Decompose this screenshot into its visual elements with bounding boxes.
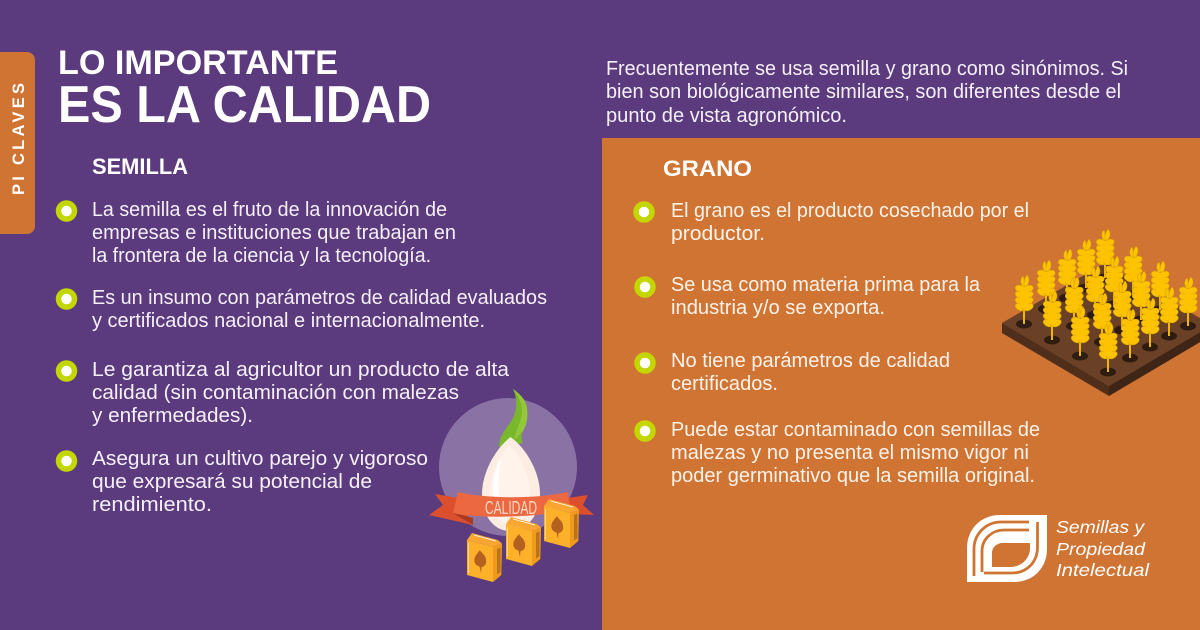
list: grano	[636, 200, 1040, 487]
intro text: punto de vista agronómico.	[606, 105, 847, 127]
semilla item 4: rendimiento.	[92, 494, 212, 516]
logo text: Intelectual	[1056, 560, 1150, 580]
logo mark	[967, 515, 1047, 582]
intro text: Frecuentemente se usa semilla y grano como sinónimos. Si	[606, 58, 1128, 80]
title: LO IMPORTANTE	[58, 44, 338, 82]
heading: grano: GRANO	[663, 156, 752, 181]
grano item 4: Puede estar contaminado con semillas de	[671, 419, 1040, 441]
illustration: wheat field	[1002, 229, 1200, 396]
logo: Semillas y Propiedad Intelectual	[967, 515, 1150, 582]
grano item 2: Se usa como materia prima para la	[671, 274, 981, 296]
semilla item 3: y enfermedades).	[92, 405, 253, 427]
grano item 3: certificados.	[671, 373, 778, 395]
grano item 4: malezas y no presenta el mismo vigor ni	[671, 442, 1029, 464]
heading: semilla: SEMILLA	[92, 154, 188, 179]
grano item 1: productor.	[671, 223, 765, 245]
semilla item 2: Es un insumo con parámetros de calidad evaluados	[92, 287, 547, 309]
semilla item 2	[58, 287, 547, 332]
semilla item 1: empresas e instituciones que trabajan en	[92, 222, 456, 244]
semilla item 1	[58, 199, 456, 267]
logo text: Semillas y	[1056, 517, 1145, 537]
grano item 4	[637, 419, 1040, 487]
semilla item 4: que expresará su potencial de	[92, 471, 372, 493]
grano item 1: El grano es el producto cosechado por el	[671, 200, 1029, 222]
semilla item 3	[58, 359, 510, 427]
illustration: seed with ribbon and bags	[429, 389, 594, 582]
semilla item 4	[58, 448, 428, 516]
list: semilla	[58, 199, 547, 516]
tab: PI claves: PI CLAVES	[10, 83, 28, 195]
grano item 2: industria y/o se exporta.	[671, 297, 885, 319]
grano item 2	[637, 274, 981, 319]
grano item 4: poder germinativo que la semilla original.	[671, 465, 1035, 487]
title	[58, 44, 431, 134]
logo text: Propiedad	[1056, 539, 1146, 559]
illustration: seed with ribbon and bags: CALIDAD	[485, 498, 537, 518]
logo text	[1056, 517, 1150, 580]
semilla item 4: Asegura un cultivo parejo y vigoroso	[92, 448, 428, 470]
intro text: bien son biológicamente similares, son diferentes desde el	[606, 81, 1121, 103]
semilla item 3: calidad (sin contaminación con malezas	[92, 382, 459, 404]
semilla item 3: Le garantiza al agricultor un producto de alta	[92, 359, 510, 381]
intro text	[606, 58, 1128, 127]
grano item 1	[636, 200, 1029, 245]
panel: grano	[602, 138, 1200, 630]
semilla item 1: La semilla es el fruto de la innovación de	[92, 199, 447, 221]
semilla item 2: y certificados nacional e internacionalmente.	[92, 310, 485, 332]
semilla item 1: la frontera de la ciencia y la tecnología.	[92, 245, 431, 267]
tab: PI claves	[0, 52, 35, 234]
grano item 3: No tiene parámetros de calidad	[671, 350, 950, 372]
grano item 3	[637, 350, 950, 395]
title: ES LA CALIDAD	[58, 76, 431, 134]
